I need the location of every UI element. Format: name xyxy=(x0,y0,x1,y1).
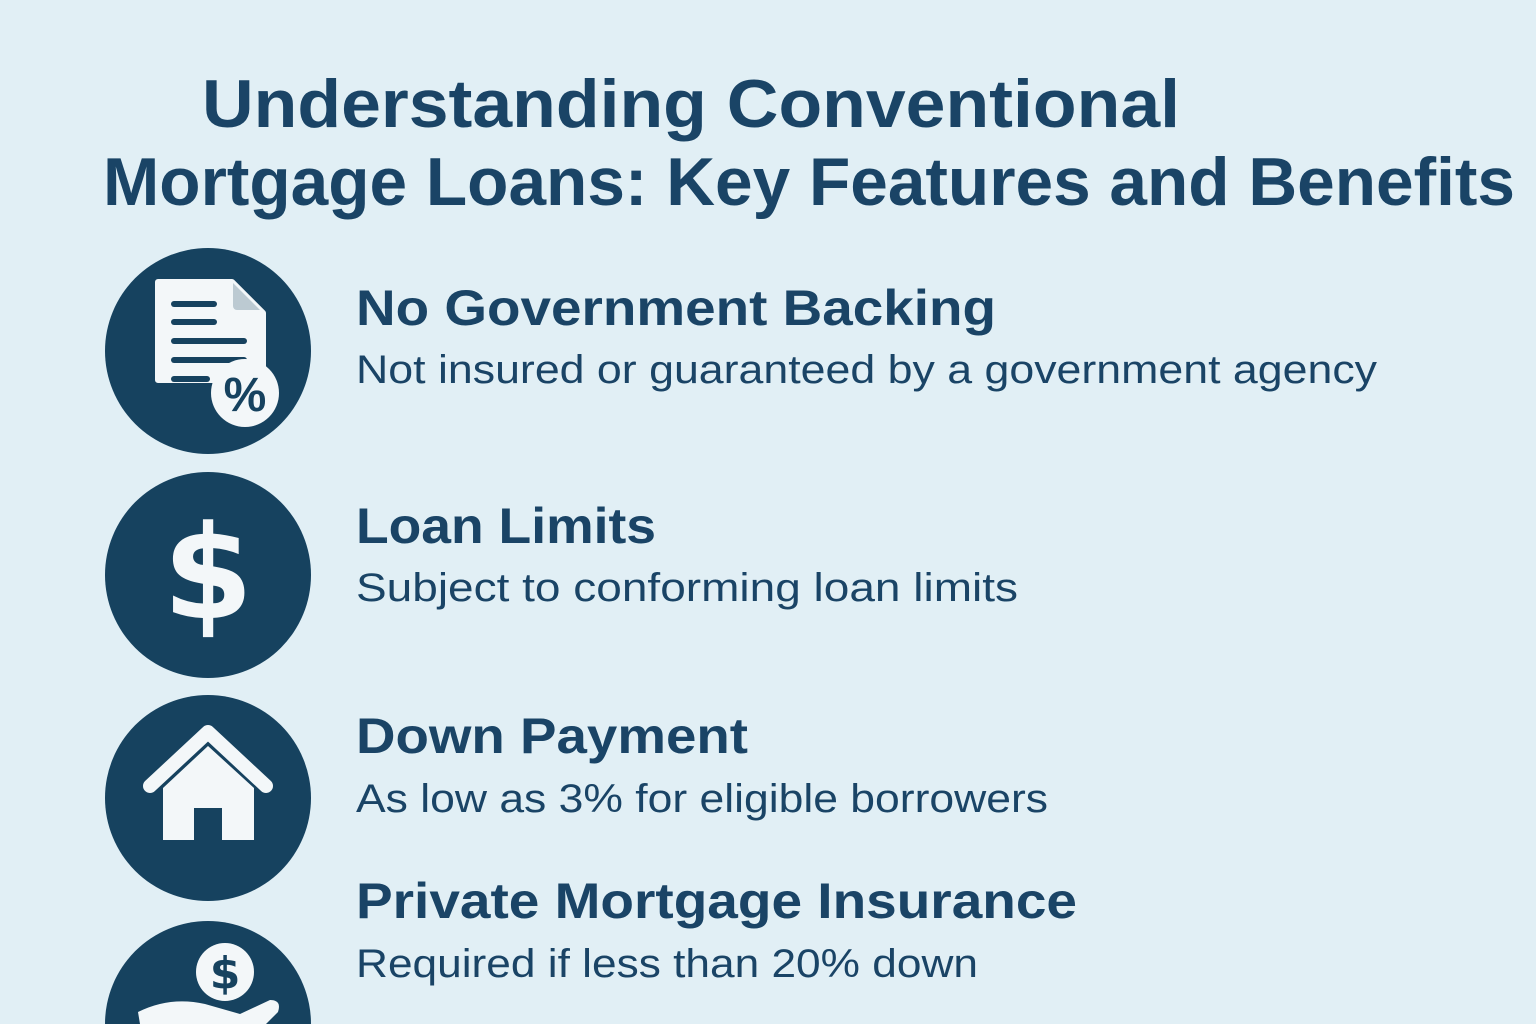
feature: private mortgage insurance xyxy=(356,873,1077,986)
icon: house xyxy=(105,695,311,901)
feature: down payment: Down Payment xyxy=(356,708,748,764)
feature: loan limits: Subject to conforming loan limits xyxy=(356,566,1018,610)
icon: document with percent xyxy=(105,248,311,454)
feature: no government backing: No Government Backing xyxy=(356,280,996,336)
feature: private mortgage insurance: Private Mortgage Insurance xyxy=(356,873,1077,929)
icon: dollar xyxy=(105,472,311,678)
feature: down payment xyxy=(356,708,1048,821)
feature: down payment: As low as 3% for eligible borrowers xyxy=(356,777,1048,821)
feature: private mortgage insurance: Required if less than 20% down xyxy=(356,942,978,986)
feature: loan limits: Loan Limits xyxy=(356,498,656,554)
icon: hand with coin xyxy=(105,921,311,1024)
title xyxy=(103,66,1515,220)
feature: no government backing: Not insured or guaranteed by a government agency xyxy=(356,348,1377,392)
icon: hand with coin: $ xyxy=(210,948,240,999)
feature: loan limits xyxy=(356,498,1018,610)
title: Understanding Conventional xyxy=(202,66,1180,142)
feature: no government backing xyxy=(356,280,1377,392)
title: Mortgage Loans: Key Features and Benefits xyxy=(103,144,1515,220)
icon: dollar: $ xyxy=(163,497,253,649)
icon: document with percent: % xyxy=(224,369,266,422)
